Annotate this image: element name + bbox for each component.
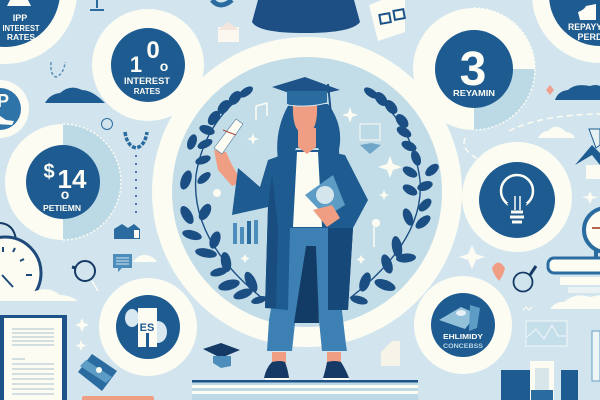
shoes [264,361,289,378]
hair [277,104,340,170]
icon: chat bubble [113,254,132,272]
face [293,105,317,134]
central ring [162,47,452,337]
circle: interest rates: 1 [130,52,142,77]
icon: music note [256,103,267,120]
blue blocks [501,361,578,400]
icon: white cloud left [133,255,157,262]
icon: coin [102,118,112,130]
icon: books right [548,258,600,293]
circle: interest rates: 0 [146,37,160,64]
icon: dark cloud right [555,85,600,100]
icon: small wreath top [212,0,232,5]
icon: sapling top [90,0,104,10]
circle: $14: o [61,186,69,202]
raised hand and arm [214,150,242,186]
circle: subsidy concerns: EHLIMIDY [443,332,483,341]
icon: small sprig [51,62,65,77]
icon: bank [114,224,140,239]
circle: small left [0,80,29,138]
icon: envelope bottom [381,341,400,366]
circle: subsidy concerns: CONCEBSS [443,343,484,350]
icon: open book small [360,124,381,154]
circle: repayment 3 [413,8,535,130]
icon: lamp [372,219,380,247]
ankles [272,352,286,363]
circle: ES pants: ES [140,322,154,334]
circle: repayment 3: REYAMIN [453,88,495,98]
icon: roof [575,129,600,179]
circle: top-left interest rates: RATES [7,32,35,42]
holding hand [313,205,340,227]
circle: top-left interest rates: IPP [13,13,27,23]
circle: interest rates: o [160,58,168,74]
circle: $14: $ [43,161,55,183]
big mortarboard at top [252,0,360,33]
circle: $14: PETIEMN [43,204,81,213]
icon: small mortarboard [203,343,240,368]
graduation cap [272,77,340,94]
icon: pink diamond [546,85,554,95]
icon: clock [0,223,50,314]
bottom platform [192,380,418,400]
icon: dark cloud left [45,88,105,103]
icon: small laurel [125,132,147,148]
circle: interest rates: INTEREST [124,76,171,86]
circle: $14: 14 [58,164,87,194]
icon: white cloud under clock [0,289,78,301]
icon: card [78,354,117,391]
icon: envelope top [218,22,239,42]
gown [232,150,368,310]
circle: subsidy concerns [414,276,512,374]
book held [305,175,345,217]
pink bar [82,396,154,400]
sparkles [75,107,598,351]
circle: interest rates: RATES [134,87,161,96]
shirt [293,152,322,227]
circle: ES pants [99,278,197,376]
circle: top-left interest rates [0,0,77,64]
circle: light bulb [462,142,572,252]
icon: light cloud right [538,127,575,138]
icon: white dot left [213,189,221,197]
circle: top-right repayment [532,0,600,63]
icon: magnifier left [72,261,98,291]
circle: repayment 3: 3 [460,43,486,96]
icon: magnifier right [514,266,536,292]
circle: interest rates [92,9,204,121]
graduate figure [214,77,368,379]
icon: small check [523,307,532,310]
dashed path right [464,114,600,160]
circle: $14 [5,124,121,240]
icon: bar chart [233,220,258,244]
scroll [214,119,243,154]
icon: glasses document [369,0,405,41]
icon: white cloud right [550,295,600,309]
jeans [267,225,347,351]
form right [592,331,600,381]
neck [298,128,316,154]
laurel wreath [178,84,441,306]
open book [0,315,67,400]
icon: pink pin [492,262,505,281]
icon: line chart [526,321,567,346]
dotted line [135,155,137,215]
dark gap between legs [294,246,319,323]
icon: clock right [584,208,600,259]
circle: top-left interest rates: INTEREST [2,23,40,33]
